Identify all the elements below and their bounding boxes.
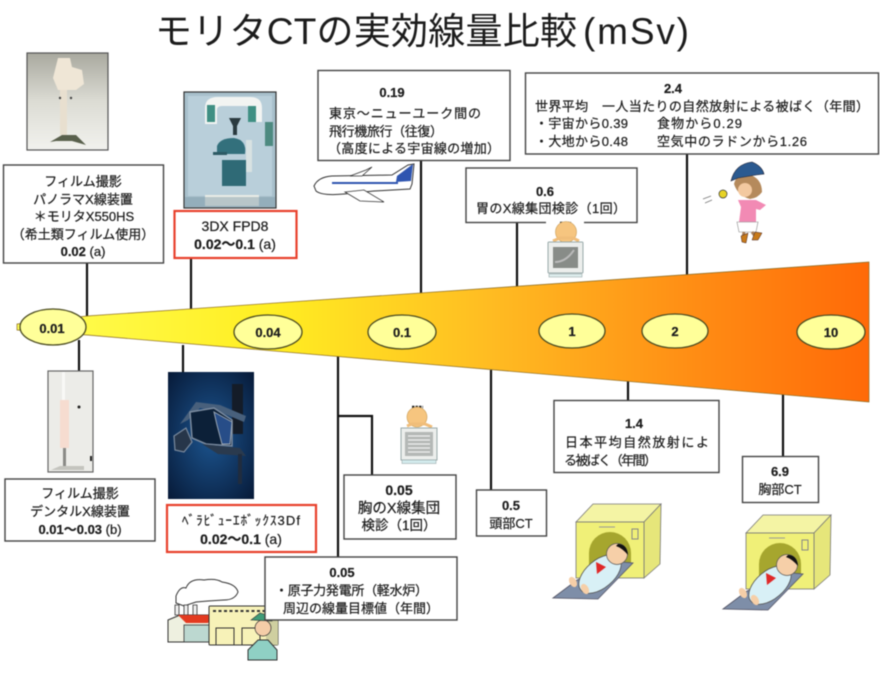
box: film panoramic: パノラマX線装置	[33, 192, 133, 207]
icon: girl playing tennis	[703, 162, 766, 243]
box: film dental: フィルム撮影	[41, 486, 119, 501]
box: head CT: 頭部CT	[489, 516, 533, 531]
icon: CT scanner chest	[723, 515, 831, 612]
box: world average natural radiation: ・大地から0.48	[535, 134, 628, 149]
box: Tokyo New York flight: 飛行機旅行（往復）	[329, 124, 443, 139]
box: head CT: 0.5	[502, 498, 520, 513]
box: stomach X-ray screening	[466, 168, 637, 222]
connector lines	[79, 154, 783, 557]
scale marker 0.01	[20, 309, 86, 345]
box: chest CT: 胸部CT	[758, 482, 802, 497]
box: world average natural radiation: 世界平均 一人当たりの自然放射による被ばく（年間）	[535, 99, 869, 114]
scale marker 2	[642, 314, 708, 348]
box: stomach X-ray screening: 胃のX線集団検診（1回）	[476, 201, 626, 216]
photo: dental X-ray unit	[48, 371, 93, 472]
icon: CT scanner head	[553, 504, 661, 601]
box: film panoramic: 0.02 (a)	[61, 244, 105, 259]
scale marker 10	[797, 315, 865, 349]
icon: person with stomach X-ray	[546, 221, 584, 277]
box: Veraview epocs 3Df: ﾍﾞﾗﾋﾞｭｰｴﾎﾞｯｸｽ3Df	[182, 513, 300, 528]
box: Japan average natural radiation: 1.4	[625, 416, 644, 431]
box: film dental	[5, 479, 155, 541]
box: head CT	[476, 490, 546, 536]
box: Veraview epocs 3Df: 0.02～0.1 (a)	[200, 531, 282, 547]
scale marker 1: 1	[568, 324, 576, 339]
box: world average natural radiation: 2.4	[664, 81, 683, 96]
photo: 3DX FPD8	[184, 92, 276, 208]
box: 3DX FPD8	[174, 211, 296, 258]
box: chest CT: 6.9	[771, 464, 789, 479]
box: film panoramic: （希土類フィルム使用）	[12, 227, 154, 242]
box: 3DX FPD8: 0.02～0.1 (a)	[194, 236, 276, 252]
box: chest X-ray screening: 0.05	[385, 482, 413, 498]
box: Tokyo New York flight: 0.19	[379, 85, 405, 100]
box: film panoramic: フィルム撮影	[44, 174, 122, 189]
box: nuclear plant target dose	[265, 557, 457, 620]
scale marker 0.1	[368, 315, 436, 349]
title: (mSv)	[583, 11, 689, 52]
scale marker 0.04	[234, 315, 302, 349]
box: 3DX FPD8: 3DX FPD8	[202, 218, 269, 234]
scale marker 0.1: 0.1	[393, 325, 411, 340]
box: Japan average natural radiation	[554, 400, 719, 472]
icon: airplane	[314, 164, 414, 202]
photo: panoramic X-ray unit	[27, 53, 108, 150]
box: nuclear plant target dose: 周辺の線量目標値（年間）	[283, 601, 439, 616]
box: film dental: 0.01～0.03 (b)	[38, 522, 122, 537]
scale marker 1	[539, 314, 605, 348]
box: film panoramic	[4, 165, 164, 263]
dose scale wedge	[17, 262, 869, 402]
scale marker 0.01: 0.01	[39, 321, 65, 336]
photo: Veraview dark unit	[168, 372, 254, 499]
box: chest CT	[742, 456, 818, 502]
box: world average natural radiation	[526, 73, 878, 154]
scale marker 2: 2	[671, 324, 679, 339]
box: Tokyo New York flight: （高度による宇宙線の増加）	[328, 141, 500, 156]
box: chest X-ray screening: 胸のX線集団	[358, 500, 440, 517]
box: Japan average natural radiation: る被ばく（年間）	[564, 453, 657, 468]
scale marker 10: 10	[824, 325, 838, 340]
box: nuclear plant target dose: 0.05	[329, 565, 355, 580]
box: world average natural radiation: 食物から0.29	[657, 116, 742, 131]
icon: nuclear power plant with worker	[168, 579, 278, 660]
box: film dental: デンタルX線装置	[30, 504, 130, 519]
box: Veraview epocs 3Df	[167, 505, 316, 552]
box: film panoramic: ＊モリタX550HS	[34, 209, 135, 224]
box: nuclear plant target dose: ・原子力発電所（軽水炉）	[275, 583, 428, 598]
box: world average natural radiation: ・宇宙から0.39	[535, 116, 628, 131]
title: モリタCTの実効線量比較	[155, 11, 577, 52]
scale marker 0.04: 0.04	[255, 325, 281, 340]
box: Tokyo New York flight: 東京～ニューユーク間の	[329, 106, 481, 121]
box: world average natural radiation: 空気中のラドンから1.26	[657, 134, 807, 149]
box: chest X-ray screening	[344, 475, 456, 539]
box: stomach X-ray screening: 0.6	[536, 184, 554, 199]
box: Japan average natural radiation: 日本平均自然放射によ	[565, 435, 709, 450]
icon: person with chest X-ray	[401, 407, 437, 464]
box: Tokyo New York flight	[318, 70, 510, 160]
box: chest X-ray screening: 検診（1回）	[361, 518, 437, 533]
